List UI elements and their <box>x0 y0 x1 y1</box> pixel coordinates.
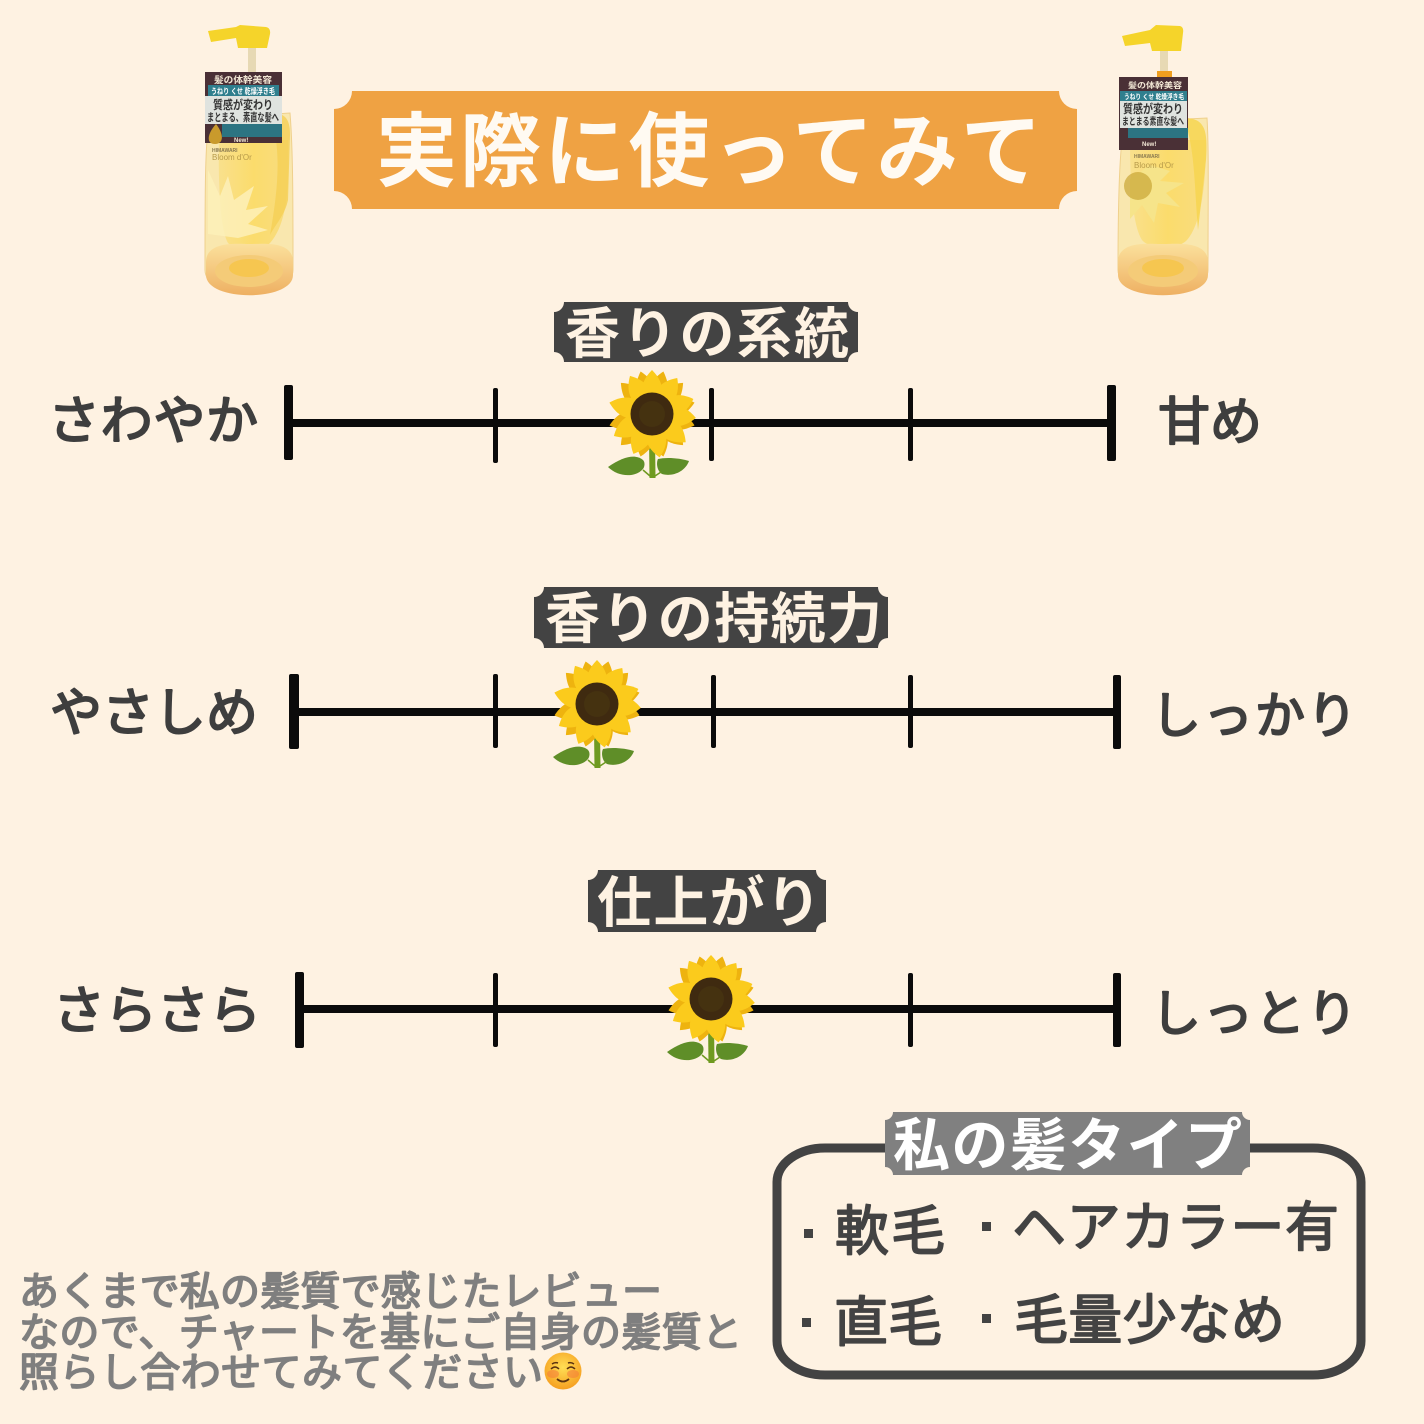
label: fresh: さわやか <box>48 393 258 451</box>
item: straight hair: 直毛 <box>834 1293 942 1353</box>
product bottle: left: New! <box>234 138 248 144</box>
product bottle: left <box>205 25 293 295</box>
panel heading: 私の髪タイプ <box>893 1114 1242 1178</box>
disclaimer note: あくまで私の髪質で感じたレビュー <box>19 1270 662 1314</box>
title banner: 実際に使ってみて <box>376 108 1042 198</box>
product bottle: right: まとまる素直な髪へ <box>1122 115 1184 128</box>
sunflower marker <box>552 659 642 768</box>
scale: scent family <box>48 369 1262 478</box>
icon: smiling face emoji <box>544 1352 582 1390</box>
item: hair color: ヘアカラー有 <box>1012 1198 1339 1258</box>
product bottle: left: 質感が変わり <box>213 97 273 112</box>
label: smooth: さらさら <box>53 983 261 1041</box>
heading: scent family: 香りの系統 <box>565 303 849 365</box>
item: low volume: 毛量少なめ <box>1014 1291 1285 1351</box>
scale: scent longevity <box>50 659 1357 768</box>
disclaimer note <box>19 1270 742 1395</box>
product bottle: left: うねり くせ 乾燥浮き毛 <box>211 86 275 96</box>
product bottle: right: Bloom d'Or <box>1134 161 1174 170</box>
product bottle: right: 質感が変わり <box>1123 101 1183 116</box>
product bottle: right: New! <box>1142 142 1156 148</box>
axis line with ticks <box>289 674 1121 749</box>
disclaimer note: 照らし合わせてみてください <box>19 1351 543 1395</box>
product bottle: right: HIMAWARI <box>1134 154 1160 160</box>
heading: finish: 仕上がり <box>597 872 821 934</box>
label: moist: しっとり <box>1151 986 1357 1042</box>
disclaimer note: なので、チャートを基にご自身の髪質と <box>19 1311 742 1355</box>
axis line with ticks <box>295 972 1121 1048</box>
product bottle: right: 髪の体幹美容 <box>1128 80 1182 90</box>
panel: my hair type <box>777 1112 1361 1375</box>
heading: scent longevity: 香りの持続力 <box>545 588 882 650</box>
sunflower marker <box>666 954 756 1063</box>
sunflower marker <box>607 369 697 478</box>
product bottle: left: HIMAWARI <box>212 148 238 154</box>
product bottle: left: まとまる、素直な髪へ <box>207 110 279 124</box>
product bottle: right: うねり くせ 乾燥浮き毛 <box>1124 92 1184 101</box>
title banner <box>334 91 1077 209</box>
product bottle: left: Bloom d'Or <box>212 153 252 162</box>
product bottle: left: 髪の体幹美容 <box>214 74 272 85</box>
axis line with ticks <box>284 385 1116 463</box>
panel frame <box>777 1148 1361 1375</box>
label: sweet: 甘め <box>1158 394 1262 452</box>
label: gentle: やさしめ <box>50 685 258 743</box>
scale: finish <box>53 954 1357 1063</box>
item: soft hair: 軟毛 <box>835 1202 945 1262</box>
label: firm: しっかり <box>1151 688 1357 744</box>
product bottle: right <box>1118 25 1208 295</box>
